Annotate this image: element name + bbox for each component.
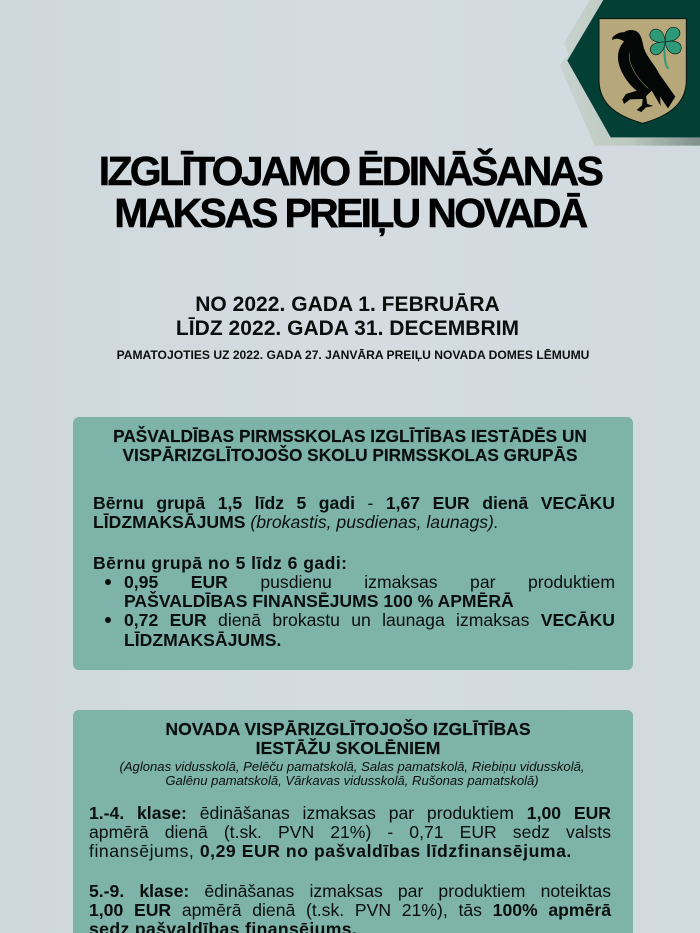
preschool heading: PAŠVALDĪBAS PIRMSSKOLAS IZGLĪTĪBAS IESTĀDĒS UN <box>113 426 587 446</box>
preschool heading <box>113 426 587 465</box>
list of schools: (Aglonas vidusskolā, Pelēču pamatskolā, Salas pamatskolā, Riebiņu vidusskolā, <box>119 759 585 774</box>
subtitle: period <box>176 293 519 340</box>
emblem: coat of arms on green hexagon <box>560 0 700 146</box>
preschool text: age 5 to 6: Bērnu grupā no 5 līdz 6 gadi: <box>93 553 348 573</box>
subtitle: period: NO 2022. GADA 1. FEBRUĀRA <box>195 293 500 316</box>
grades 5 to 9 <box>89 881 612 933</box>
grades 1 to 4: apmērā dienā (t.sk. PVN 21%) - 0,71 EUR sedz valsts <box>89 822 611 842</box>
panel: general education <box>73 710 633 933</box>
title: MAKSAS PREIĻU NOVADĀ <box>114 190 586 236</box>
bullet list <box>105 572 615 650</box>
panel: preschool <box>73 417 633 670</box>
grades 1 to 4 <box>89 803 611 861</box>
list of schools: Galēnu pamatskolā, Vārkavas vidusskolā, Rušonas pamatskolā) <box>165 773 539 788</box>
preschool text: age 1.5 to 5: Bērnu grupā 1,5 līdz 5 gadi - 1,67 EUR dienā VECĀKU <box>93 493 615 513</box>
bullet list: 0,72 EUR dienā brokastu un launaga izmaksas VECĀKU <box>124 610 615 630</box>
general education heading: IESTĀŽU SKOLĒNIEM <box>256 738 440 758</box>
note: council decision: PAMATOJOTIES UZ 2022. GADA 27. JANVĀRA PREIĻU NOVADA DOMES LĒMUMU <box>117 348 589 362</box>
preschool text: age 1.5 to 5: LĪDZMAKSĀJUMS (brokastis, pusdienas, launags). <box>93 512 499 532</box>
grades 5 to 9: 1,00 EUR apmērā dienā (t.sk. PVN 21%), tās 100% apmērā <box>89 900 611 920</box>
grades 5 to 9: 5.-9. klase: ēdināšanas izmaksas par produktiem noteiktas <box>89 881 611 901</box>
subtitle: period: LĪDZ 2022. GADA 31. DECEMBRIM <box>176 317 519 340</box>
bullet list: LĪDZMAKSĀJUMS. <box>124 630 281 650</box>
title: IZGLĪTOJAMO ĒDINĀŠANAS <box>99 148 601 194</box>
preschool text: age 1.5 to 5 <box>93 493 615 532</box>
preschool heading: VISPĀRIZGLĪTOJOŠO SKOLU PIRMSSKOLAS GRUPĀS <box>123 445 577 465</box>
general education heading: NOVADA VISPĀRIZGLĪTOJOŠO IZGLĪTĪBAS <box>165 719 531 739</box>
bullet list: 0,95 EUR pusdienu izmaksas par produktiem <box>124 572 615 592</box>
bullet list: PAŠVALDĪBAS FINANSĒJUMS 100 % APMĒRĀ <box>124 591 514 611</box>
list of schools <box>119 759 585 788</box>
grades 1 to 4: 1.-4. klase: ēdināšanas izmaksas par produktiem 1,00 EUR <box>89 803 611 823</box>
grades 1 to 4: finansējums, 0,29 EUR no pašvaldības līdzfinansējuma. <box>89 841 572 861</box>
title <box>99 148 603 236</box>
general education heading <box>165 718 531 758</box>
